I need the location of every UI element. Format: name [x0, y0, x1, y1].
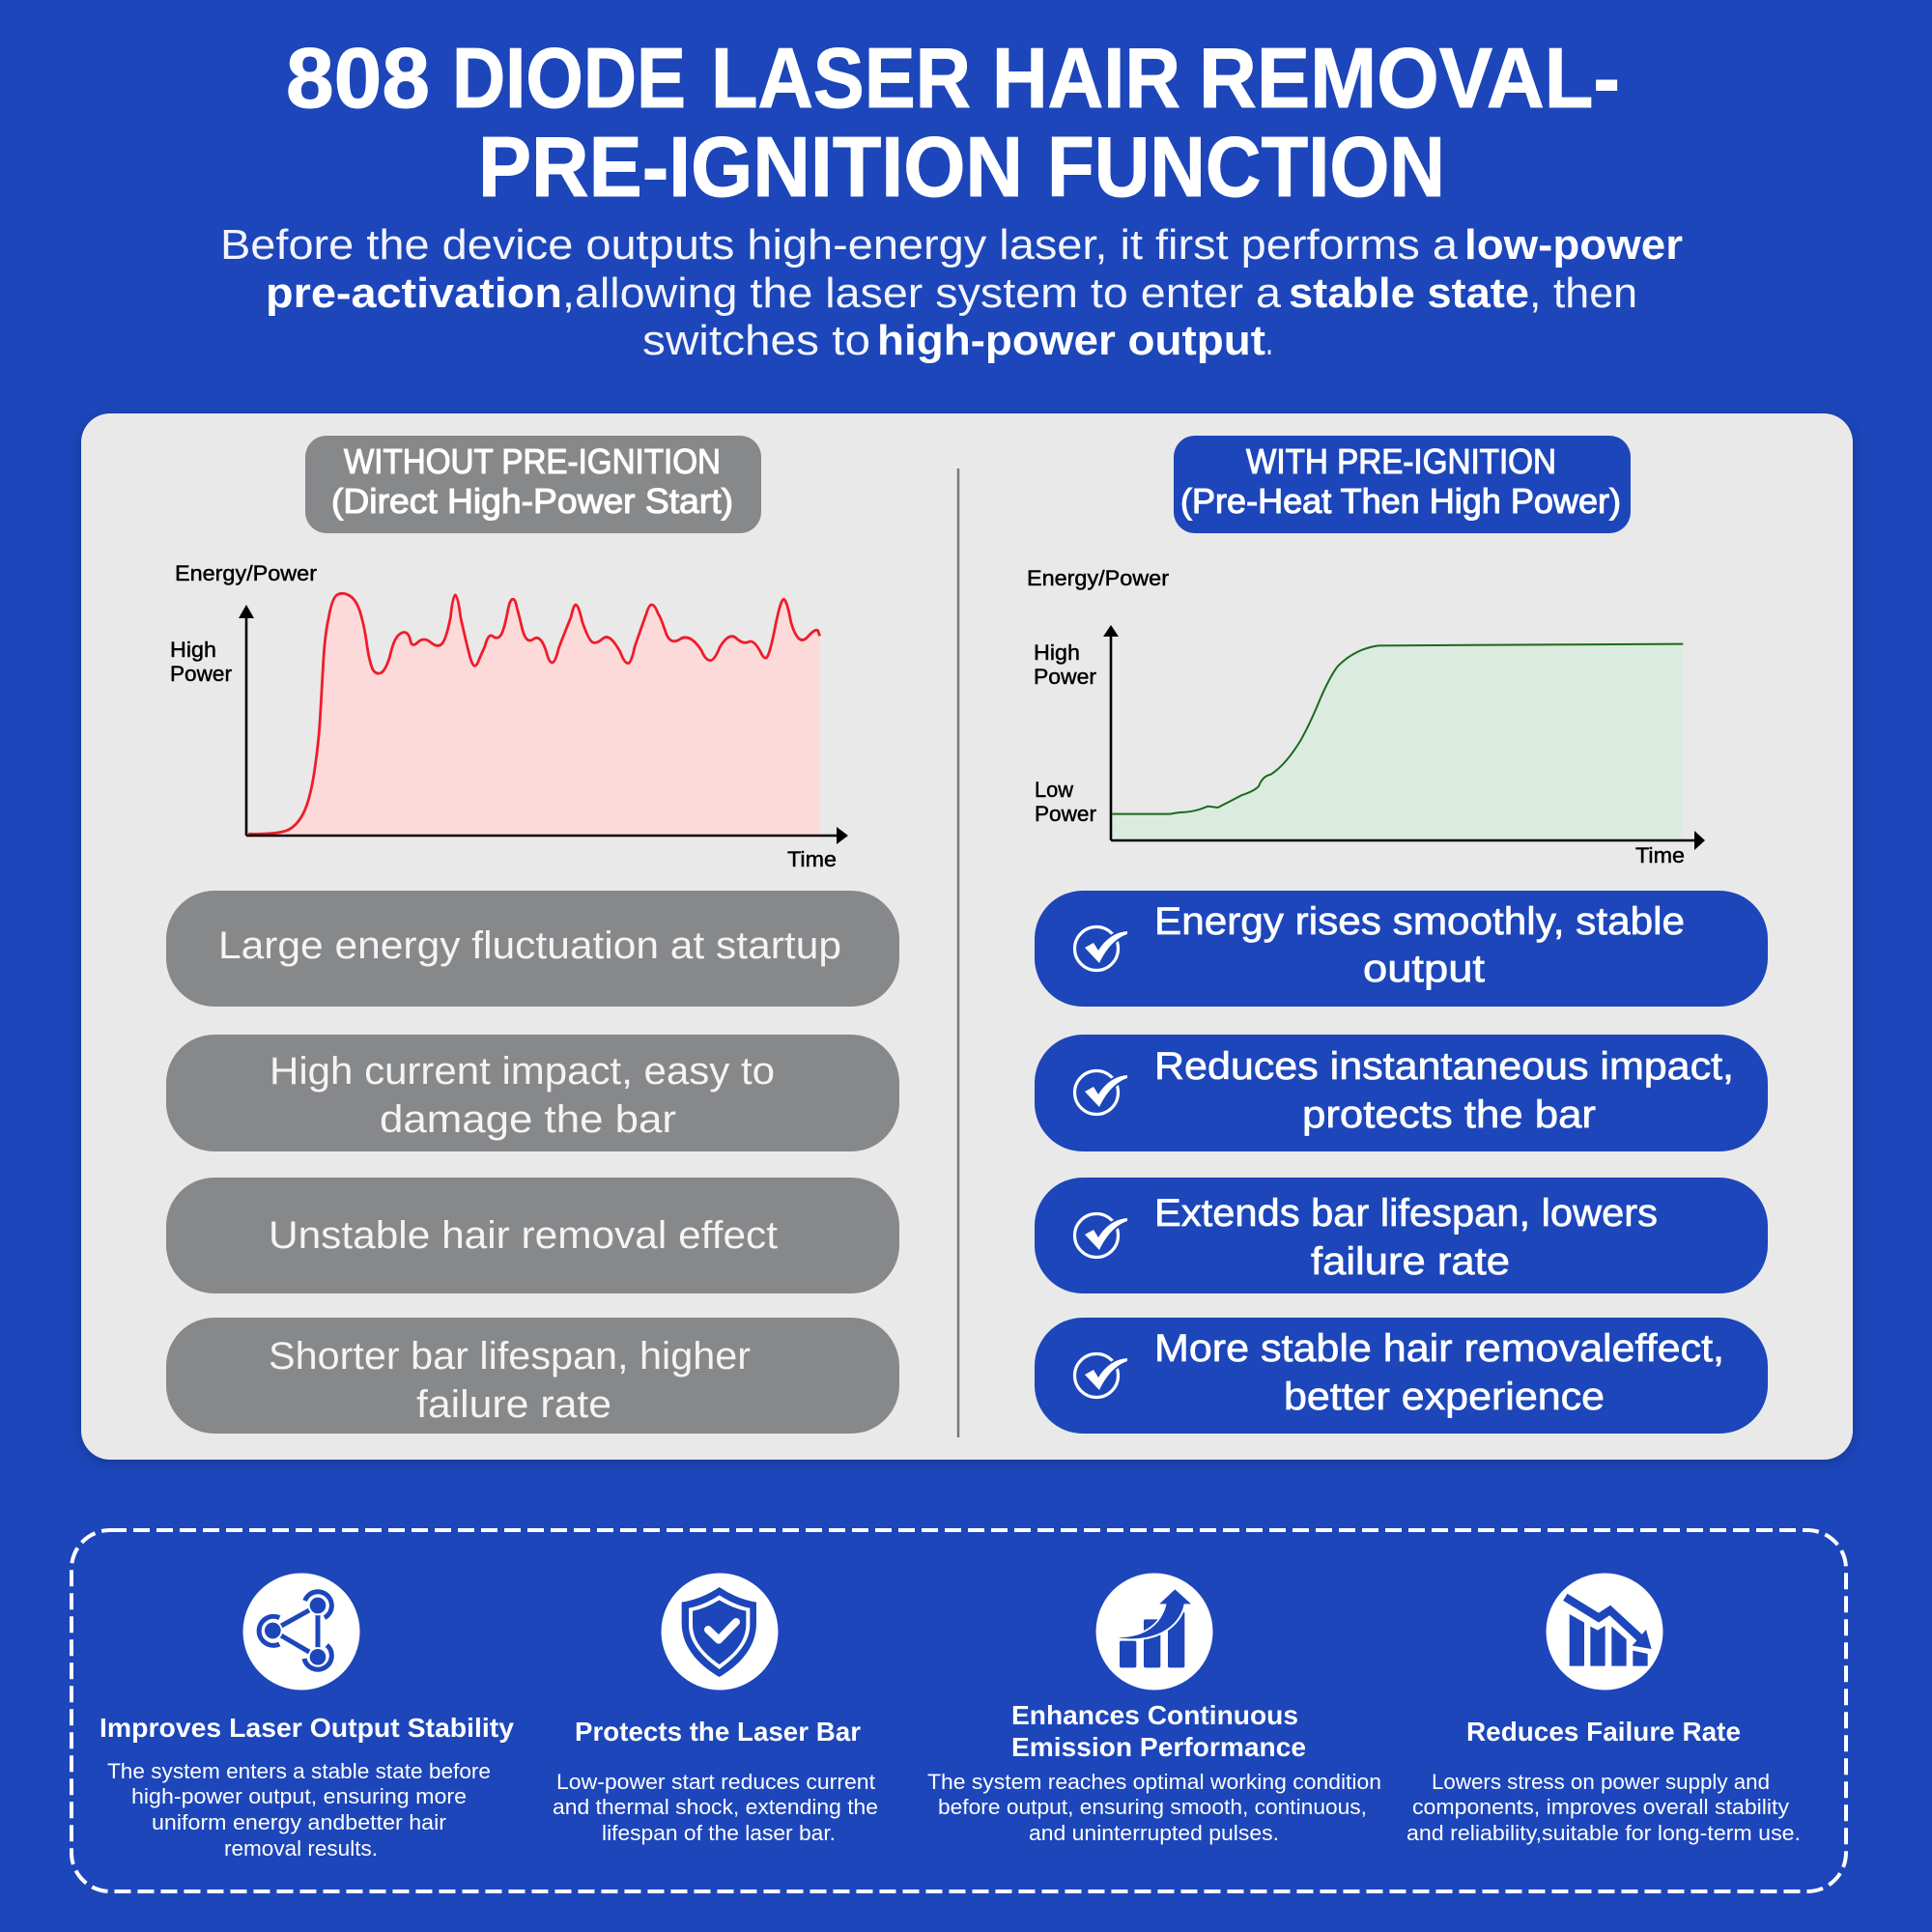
- heading: with pre-ignition: (Pre-Heat Then High Power): [1180, 481, 1621, 521]
- benefit: improves laser output stability: removal results.: [224, 1836, 378, 1861]
- drawback pill 4: [166, 1318, 899, 1434]
- title: LASER: [711, 30, 971, 126]
- benefit: reduces failure rate: [1406, 1573, 1801, 1845]
- heading: without pre-ignition: [305, 436, 761, 533]
- benefit: enhances continuous emission performance: Emission Performance: [1011, 1732, 1306, 1762]
- line chart: without pre-ignition: Energy/Power: [175, 561, 317, 585]
- icon: check mark: [1074, 1070, 1127, 1115]
- benefit pill 4: [1035, 1318, 1768, 1434]
- icon: check mark: [1074, 927, 1127, 970]
- heading: with pre-ignition: [1174, 436, 1631, 533]
- title: 808: [286, 30, 430, 126]
- benefit: protects the laser bar: and thermal shock, extending the: [553, 1795, 878, 1819]
- benefit: enhances continuous emission performance: before output, ensuring smooth, continuous,: [938, 1795, 1367, 1819]
- benefit pill 3: failure rate: [1311, 1240, 1510, 1283]
- benefit pill 3: [1035, 1178, 1768, 1293]
- heading: with pre-ignition: WITH PRE-IGNITION: [1246, 441, 1556, 481]
- drawback pill 2: damage the bar: [380, 1098, 676, 1141]
- icon: check mark: [1074, 1354, 1127, 1397]
- subtitle text block: switches to: [642, 317, 870, 364]
- subtitle text block: , then: [1529, 270, 1637, 317]
- icon: shield: [661, 1573, 779, 1690]
- title: HAIR: [992, 30, 1180, 126]
- benefit: protects the laser bar: [553, 1573, 878, 1845]
- benefit: improves laser output stability: The system enters a stable state before: [107, 1759, 491, 1783]
- panel: benefits dashed box: [71, 1530, 1846, 1891]
- benefit pill 1: [1035, 891, 1768, 1007]
- benefit: protects the laser bar: lifespan of the laser bar.: [602, 1821, 836, 1845]
- benefit: protects the laser bar: Low-power start reduces current: [556, 1770, 875, 1794]
- subtitle text block: stable state: [1289, 270, 1529, 317]
- icon: falling bars: [1546, 1573, 1663, 1690]
- drawback pill 2: High current impact, easy to: [270, 1050, 775, 1093]
- benefit: reduces failure rate: components, improves overall stability: [1412, 1795, 1789, 1819]
- icon: check mark: [1074, 1213, 1127, 1258]
- title: PRE-IGNITION: [478, 119, 1023, 214]
- line chart: without pre-ignition: High: [170, 638, 216, 662]
- benefit: enhances continuous emission performance: and uninterrupted pulses.: [1029, 1821, 1279, 1845]
- line chart: with pre-ignition: Low: [1035, 778, 1073, 802]
- benefit pill 4: More stable hair removaleffect,: [1154, 1327, 1724, 1370]
- benefit: reduces failure rate: Lowers stress on power supply and: [1432, 1770, 1770, 1794]
- benefit: reduces failure rate: Reduces Failure Rate: [1466, 1717, 1741, 1747]
- benefit: reduces failure rate: and reliability,suitable for long-term use.: [1406, 1821, 1801, 1845]
- heading: without pre-ignition: (Direct High-Power Start): [331, 481, 733, 521]
- heading: without pre-ignition: WITHOUT PRE-IGNITION: [344, 441, 721, 481]
- benefit: enhances continuous emission performance: The system reaches optimal working condition: [927, 1770, 1381, 1794]
- benefit pill 4: better experience: [1284, 1376, 1605, 1418]
- benefit pill 1: Energy rises smoothly, stable: [1154, 900, 1685, 943]
- benefit pill 1: output: [1363, 948, 1485, 990]
- benefit: enhances continuous emission performance: [927, 1573, 1381, 1845]
- benefit: improves laser output stability: uniform energy andbetter hair: [152, 1810, 446, 1834]
- benefit: enhances continuous emission performance: Enhances Continuous: [1011, 1700, 1298, 1730]
- title: [286, 30, 1620, 214]
- drawback pill 4: Shorter bar lifespan, higher: [269, 1335, 751, 1378]
- drawback pill 1: [166, 891, 899, 1007]
- title: REMOVAL-: [1199, 30, 1620, 126]
- drawback pill 3: Unstable hair removal effect: [269, 1214, 778, 1257]
- line chart: with pre-ignition: Power: [1035, 802, 1096, 826]
- benefit: protects the laser bar: Protects the Laser Bar: [575, 1717, 861, 1747]
- benefit pill 3: Extends bar lifespan, lowers: [1154, 1192, 1658, 1235]
- benefit: improves laser output stability: high-power output, ensuring more: [131, 1784, 467, 1808]
- icon: share nodes: [243, 1573, 359, 1690]
- benefit pill 2: Reduces instantaneous impact,: [1154, 1045, 1734, 1088]
- panel: comparison: [81, 413, 1853, 1460]
- benefit: improves laser output stability: [99, 1573, 514, 1861]
- benefit: improves laser output stability: Improves Laser Output Stability: [99, 1713, 514, 1743]
- line chart: with pre-ignition: Time: [1635, 843, 1685, 867]
- drawback pill 1: Large energy fluctuation at startup: [218, 924, 841, 967]
- line chart: with pre-ignition: Energy/Power: [1027, 566, 1169, 590]
- line chart: without pre-ignition: [170, 561, 848, 871]
- drawback pill 3: [166, 1178, 899, 1293]
- benefit pill 2: protects the bar: [1302, 1094, 1596, 1136]
- line chart: with pre-ignition: [1027, 566, 1705, 867]
- line chart: with pre-ignition: High: [1034, 640, 1080, 665]
- subtitle text block: ,allowing the laser system to enter a: [562, 270, 1282, 317]
- icon: rising bars: [1095, 1573, 1213, 1690]
- title: FUNCTION: [1047, 119, 1445, 214]
- line chart: with pre-ignition: Power: [1034, 665, 1096, 689]
- subtitle text block: Before the device outputs high-energy laser, it first performs a: [220, 221, 1459, 269]
- subtitle text block: pre-activation: [266, 270, 562, 317]
- subtitle text block: high-power output: [877, 317, 1265, 364]
- line chart: without pre-ignition: Time: [787, 847, 837, 871]
- drawback pill 4: failure rate: [416, 1383, 611, 1426]
- line chart: without pre-ignition: Power: [170, 662, 232, 686]
- subtitle text block: [220, 221, 1683, 364]
- benefit pill 2: [1035, 1035, 1768, 1151]
- subtitle text block: low-power: [1464, 221, 1683, 269]
- subtitle text block: .: [1265, 317, 1273, 364]
- title: DIODE: [452, 30, 686, 126]
- drawback pill 2: [166, 1035, 899, 1151]
